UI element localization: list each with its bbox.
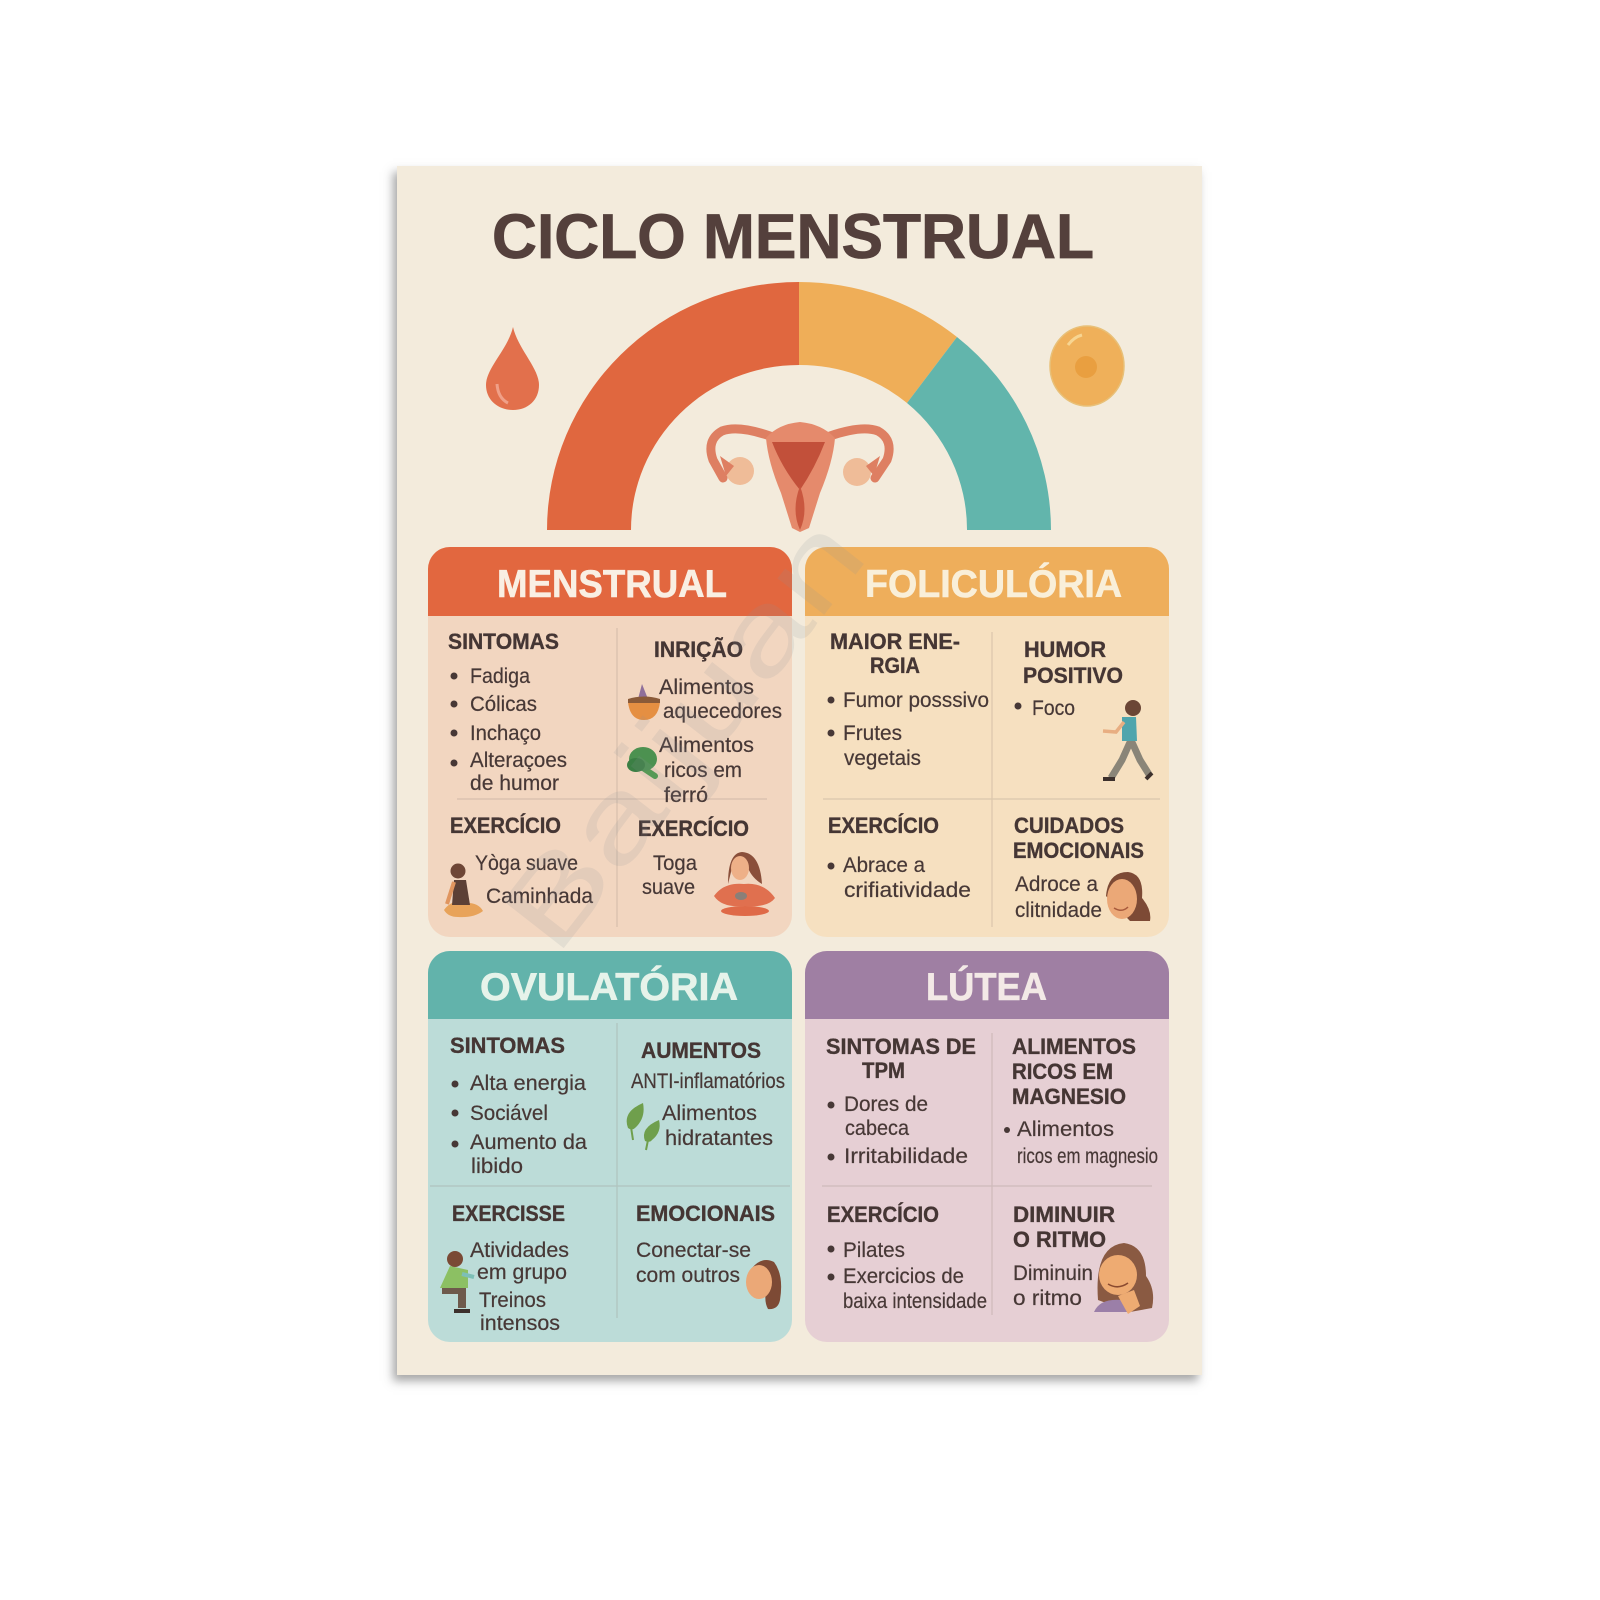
block: nutrição: ferró	[664, 784, 708, 807]
block: maior energia	[828, 629, 989, 770]
icon: leaves	[627, 1103, 660, 1150]
icon: egg cell	[1050, 326, 1124, 406]
block: alimentos ricos em magnésio: ricos em magnesio	[1017, 1145, 1158, 1168]
block: cuidados emocionais: clitnidade	[1015, 899, 1102, 922]
block: cuidados emocionais	[1013, 813, 1144, 922]
block: cuidados emocionais: Adroce a	[1015, 873, 1098, 896]
block: sintomas de tpm: TPM	[862, 1058, 905, 1083]
block: nutrição: aquecedores	[663, 700, 782, 723]
header: lútea	[805, 951, 1169, 1019]
block: sintomas: de humor	[470, 772, 559, 795]
icon: resting girl	[1094, 1243, 1153, 1314]
block: exercício left	[450, 813, 593, 908]
block: sintomas: Cólicas	[470, 693, 537, 716]
block: sintomas: Sociável	[470, 1102, 548, 1125]
block: exercisse: Treinos	[479, 1289, 546, 1312]
block: maior energia: Frutes	[843, 722, 902, 745]
block: exercício left: Yòga suave	[475, 852, 578, 875]
block: exercício right: Toga	[653, 852, 697, 875]
block: exercício left: Caminhada	[486, 885, 593, 908]
block: exercisse: Atividades	[470, 1239, 569, 1262]
block: alimentos ricos em magnésio	[1004, 1034, 1158, 1168]
block: sintomas: libido	[471, 1155, 523, 1178]
block: exercisse: EXERCISSE	[452, 1201, 565, 1226]
block: sintomas de tpm	[826, 1034, 976, 1168]
block: diminuir o ritmo	[1013, 1202, 1115, 1310]
poster background	[397, 166, 1202, 1375]
block: maior energia: RGIA	[870, 653, 920, 678]
panel: menstrual: MENSTRUAL	[497, 563, 727, 606]
panel: folicular	[805, 547, 1169, 937]
block: exercisse: em grupo	[477, 1261, 567, 1284]
arc: ovulatory phase	[907, 337, 1051, 530]
block: diminuir o ritmo: DIMINUIR	[1013, 1202, 1115, 1227]
panel: folicular: FOLICULÓRIA	[865, 562, 1122, 606]
block: exercício	[828, 813, 971, 902]
block: nutrição: INRIÇÃO	[654, 637, 743, 662]
panel: ovulatória	[428, 951, 792, 1342]
icon: smiling face	[1106, 872, 1150, 921]
block: exercício	[827, 1202, 987, 1313]
block: alimentos ricos em magnésio: ALIMENTOS	[1012, 1034, 1136, 1059]
block: emocionais: Conectar-se	[636, 1239, 751, 1262]
block: exercício: Abrace a	[843, 854, 925, 877]
block: exercício: baixa intensidade	[843, 1290, 987, 1313]
block: exercício: crifiatividade	[844, 879, 971, 902]
block: exercisse: intensos	[480, 1312, 560, 1335]
panel: ovulatória: OVULATÓRIA	[480, 965, 738, 1009]
block: diminuir o ritmo: Diminuin	[1013, 1262, 1093, 1285]
block: sintomas: Inchaço	[470, 722, 541, 745]
block: exercisse	[452, 1201, 569, 1335]
block: exercício: EXERCÍCIO	[828, 813, 939, 838]
block: sintomas de tpm: Irritabilidade	[844, 1145, 968, 1168]
block: nutrição: Alimentos	[659, 676, 754, 699]
block: sintomas	[450, 1033, 587, 1178]
arc: menstrual phase	[547, 282, 799, 530]
block: alimentos ricos em magnésio: MAGNESIO	[1012, 1084, 1126, 1109]
block: exercício right	[638, 816, 749, 899]
block: aumentos: Alimentos	[662, 1102, 757, 1125]
block: sintomas: Fadiga	[470, 665, 530, 688]
block: emocionais	[636, 1201, 775, 1287]
icon: woman meditating	[714, 852, 775, 916]
block: sintomas: Alta energia	[470, 1072, 586, 1095]
block: emocionais: EMOCIONAIS	[636, 1201, 775, 1226]
header: folicular	[805, 547, 1169, 616]
block: humor positivo: POSITIVO	[1023, 663, 1123, 688]
block: humor positivo: HUMOR	[1024, 637, 1106, 662]
block: cuidados emocionais: EMOCIONAIS	[1013, 838, 1144, 863]
block: emocionais: com outros	[636, 1264, 740, 1287]
block: sintomas: Alteraçoes	[470, 749, 567, 772]
block: sintomas de tpm: cabeca	[845, 1117, 909, 1140]
block: aumentos: AUMENTOS	[641, 1038, 761, 1063]
block: nutrição	[654, 637, 782, 807]
icon: uterus	[711, 422, 889, 532]
block: exercício right: EXERCÍCIO	[638, 816, 749, 841]
block: sintomas: Aumento da	[470, 1131, 587, 1154]
cycle arc chart	[547, 282, 1051, 530]
block: sintomas de tpm: Dores de	[844, 1093, 928, 1116]
icon: warm bowl	[628, 684, 660, 720]
header: ovulatória	[428, 951, 792, 1019]
arc: follicular phase	[799, 282, 957, 403]
icon: blood drop	[486, 327, 539, 410]
panel: lútea	[805, 951, 1169, 1342]
block: alimentos ricos em magnésio: Alimentos	[1017, 1118, 1114, 1141]
block: aumentos: hidratantes	[665, 1127, 773, 1150]
block: exercício right: suave	[642, 876, 695, 899]
block: exercício left: EXERCÍCIO	[450, 813, 561, 838]
block: aumentos: ANTI-inflamatórios	[631, 1070, 785, 1093]
block: diminuir o ritmo: O RITMO	[1013, 1227, 1106, 1252]
block: diminuir o ritmo: o ritmo	[1013, 1287, 1082, 1310]
block: nutrição: Alimentos	[659, 734, 754, 757]
block: maior energia: Fumor posssivo	[843, 689, 989, 712]
block: aumentos	[631, 1038, 785, 1150]
block: nutrição: ricos em	[664, 759, 742, 782]
block: cuidados emocionais: CUIDADOS	[1014, 813, 1124, 838]
panel: menstrual	[428, 547, 792, 937]
icon: broccoli	[627, 747, 657, 776]
block: exercício: EXERCÍCIO	[827, 1202, 939, 1227]
icon: calm face	[746, 1260, 781, 1309]
block: humor positivo	[1014, 637, 1123, 720]
icon: squatting figure	[440, 1251, 474, 1311]
block: maior energia: vegetais	[844, 747, 921, 770]
title: CICLO MENSTRUAL	[492, 202, 1094, 272]
panel: lútea: LÚTEA	[926, 965, 1047, 1009]
block: humor positivo: Foco	[1032, 697, 1075, 720]
block: alimentos ricos em magnésio: RICOS EM	[1012, 1059, 1113, 1084]
block: exercício: Pilates	[843, 1239, 905, 1262]
icon: walking woman	[1103, 700, 1152, 779]
block: maior energia: MAIOR ENE-	[830, 629, 960, 654]
block: sintomas	[448, 629, 567, 795]
block: sintomas de tpm: SINTOMAS DE	[826, 1034, 976, 1059]
block: exercício: Exercicios de	[843, 1265, 964, 1288]
icon: yoga figure	[444, 864, 483, 917]
watermark: Baijuan	[476, 494, 889, 973]
block: sintomas: SINTOMAS	[448, 629, 559, 654]
block: sintomas: SINTOMAS	[450, 1033, 565, 1058]
header: menstrual	[428, 547, 792, 616]
